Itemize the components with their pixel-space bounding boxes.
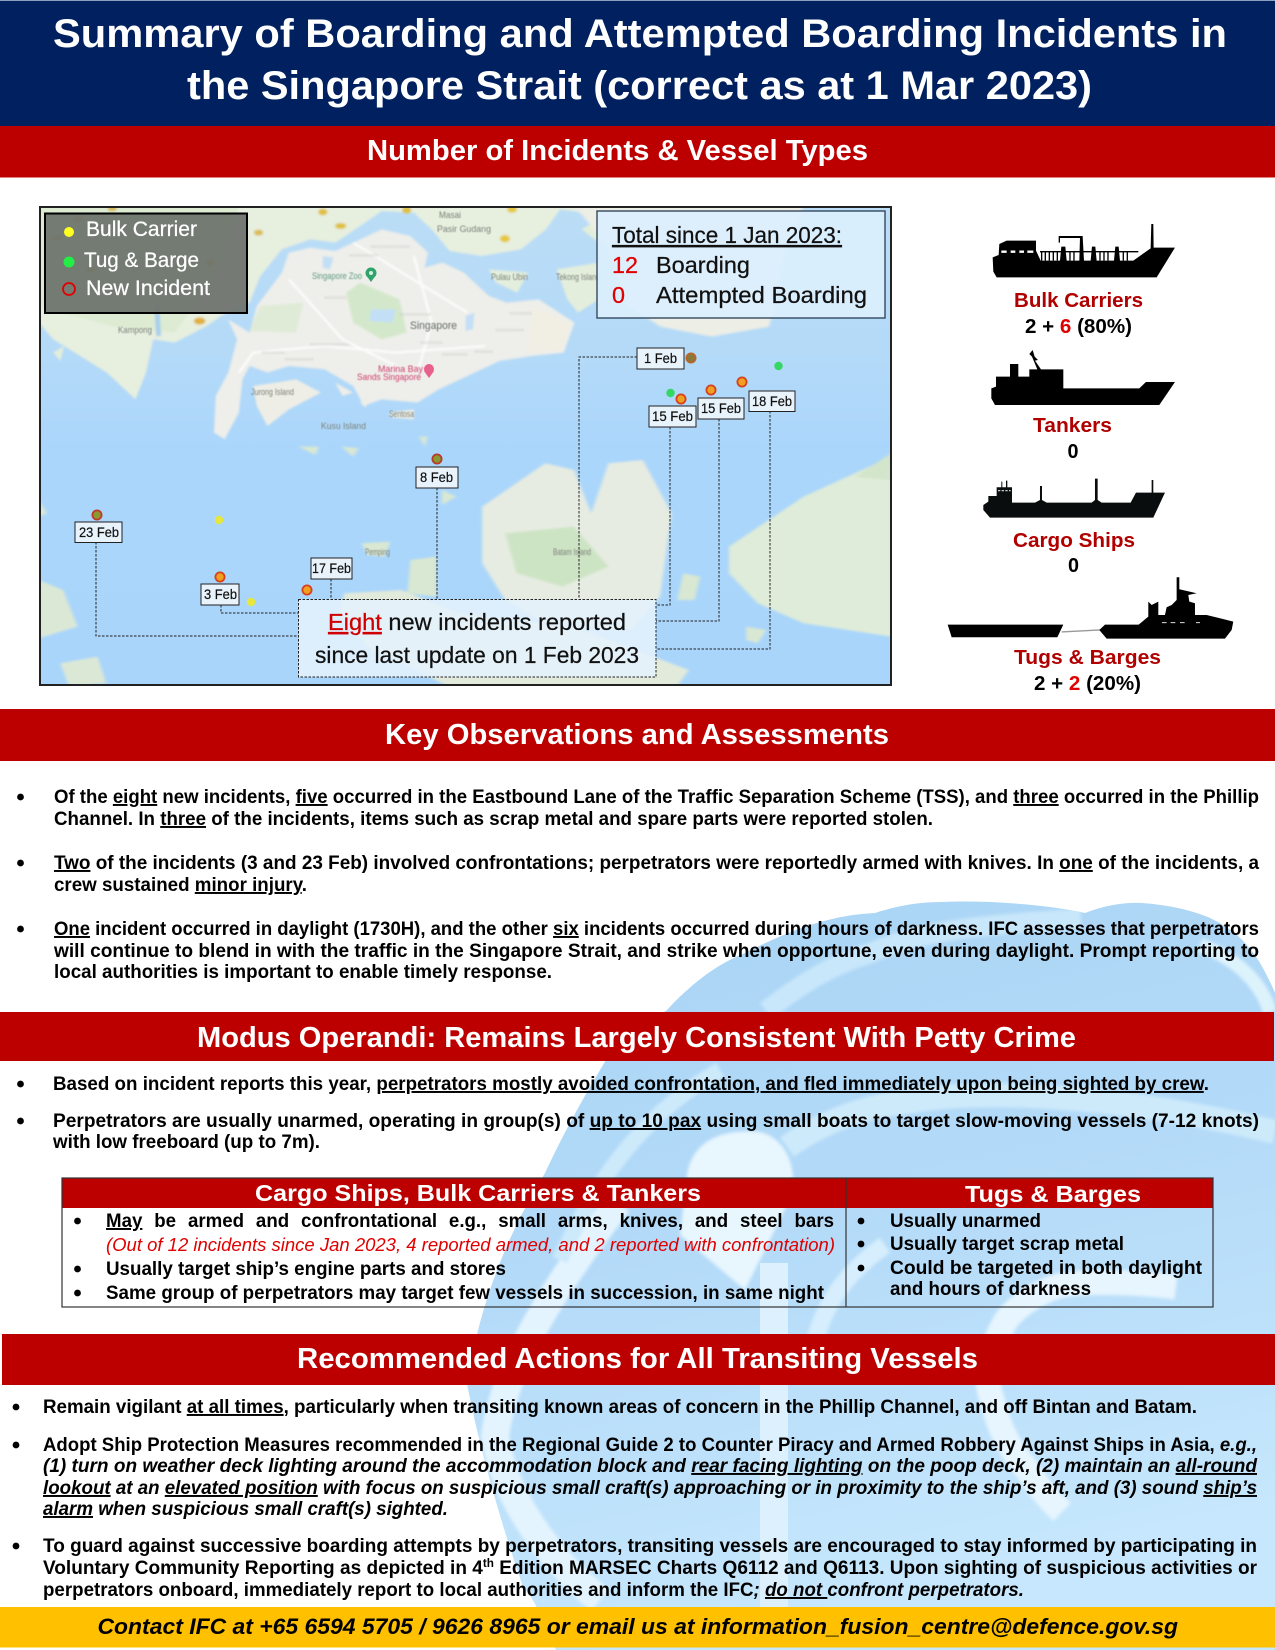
total incidents box: 0 bbox=[612, 282, 625, 308]
text block: recommended actions: th bbox=[483, 1556, 494, 1570]
map place names bbox=[118, 210, 600, 557]
date labels: 15 Feb bbox=[652, 409, 693, 424]
text block: recommended actions: (1) turn on weather deck lighting around the accommodation block and rear facing lighting on the poop deck, (2) maintain an all-round bbox=[43, 1455, 1258, 1477]
date labels: 18 Feb bbox=[752, 394, 792, 409]
table cell: tugs and barges list: Could be targeted in both daylight bbox=[890, 1257, 1202, 1279]
map place names: Kampong bbox=[118, 325, 152, 335]
count: cargo ships: 0 bbox=[1068, 554, 1079, 577]
text block: recommended actions: Adopt Ship Protection Measures recommended in the Regional Guide 2 to Counter Piracy and Armed Robbery Against Ships in Asia, e.g., bbox=[43, 1434, 1257, 1456]
map place names: Sands Singapore bbox=[357, 372, 421, 382]
heading: Modus Operandi: Modus Operandi: Remains Largely Consistent With Petty Crime bbox=[197, 1022, 1076, 1054]
table cell: cargo ships list bbox=[74, 1210, 835, 1304]
map legend: Tug & Barge bbox=[84, 248, 199, 272]
text block: modus operandi: Based on incident reports this year, perpetrators mostly avoided confrontation, and fled immediately upon being sighted by crew. bbox=[53, 1073, 1209, 1095]
label: tugs and barges: Tugs & Barges bbox=[1014, 647, 1161, 669]
icon: tanker silhouette bbox=[991, 350, 1175, 405]
map place names: Marina Bay bbox=[378, 364, 423, 374]
background watermark: IFC logo bbox=[440, 890, 1275, 1650]
heading: Recommended Actions: Recommended Actions for All Transiting Vessels bbox=[297, 1343, 978, 1375]
title bar: Summary of Boarding and Attempted Boarding Incidents in bbox=[53, 12, 1227, 56]
text block: recommended actions: To guard against successive boarding attempts by perpetrators, transiting vessels are encouraged to stay informed by participating in bbox=[43, 1535, 1257, 1557]
text block: key observations: crew sustained minor injury. bbox=[54, 874, 307, 896]
table cell: tugs and barges list bbox=[858, 1210, 1202, 1300]
map place names: Pulau Ubin bbox=[491, 272, 528, 282]
contact footer bbox=[0, 1607, 1275, 1648]
icon: tug and barge silhouette bbox=[948, 577, 1233, 639]
date labels: 15 Feb bbox=[701, 401, 741, 416]
panel: vessel types bbox=[948, 224, 1233, 695]
incident markers bbox=[92, 353, 783, 606]
map place names: Pasir Gudang bbox=[437, 224, 491, 234]
text block: recommended actions: alarm when suspicious small craft(s) sighted. bbox=[43, 1498, 448, 1520]
date labels: 17 Feb bbox=[312, 561, 351, 576]
table cell: cargo ships list: May be armed and confrontational e.g., small arms, knives, and steel bars bbox=[106, 1210, 834, 1232]
text block: modus operandi: Perpetrators are usually unarmed, operating in group(s) of up to 10 pax using small boats to target slow-moving vessels (7-12 knots) bbox=[53, 1110, 1259, 1132]
date labels: 8 Feb bbox=[420, 470, 453, 485]
callout: eight new incidents: since last update on 1 Feb 2023 bbox=[315, 642, 639, 668]
map place names: Tekong Island bbox=[556, 272, 600, 282]
total incidents box: Boarding bbox=[656, 252, 750, 278]
heading: Number of Incidents and Vessel Types: Number of Incidents & Vessel Types bbox=[367, 135, 868, 167]
text block: key observations: Two of the incidents (3 and 23 Feb) involved confrontations; perpetrators were reportedly armed with knives. In one of the incidents, a bbox=[54, 852, 1259, 874]
text block: recommended actions: perpetrators onboard, immediately report to local authorities and inform the IFC; do not confront perpetrators. bbox=[43, 1579, 1024, 1601]
text block: modus operandi: with low freeboard (up to 7m). bbox=[52, 1131, 320, 1153]
map place names: Masai bbox=[439, 210, 461, 220]
map pins bbox=[366, 268, 434, 378]
date labels: 1 Feb bbox=[644, 351, 677, 366]
title bar: the Singapore Strait (correct as at 1 Mar 2023) bbox=[187, 64, 1092, 108]
table: perpetrator profile by vessel type bbox=[62, 1178, 1213, 1307]
text block: key observations: Channel. In three of the incidents, items such as scrap metal and spare parts were reported stolen. bbox=[54, 808, 933, 830]
map place names: Batam Island bbox=[553, 547, 591, 557]
text block: recommended actions bbox=[13, 1396, 1258, 1601]
total incidents box: 12 bbox=[612, 252, 638, 278]
table cell: tugs and barges list: Usually unarmed bbox=[890, 1210, 1041, 1232]
map place names: Singapore bbox=[410, 320, 457, 332]
date labels: 23 Feb bbox=[79, 525, 119, 540]
map legend: Bulk Carrier bbox=[86, 217, 197, 241]
map place names: Singapore Zoo bbox=[312, 271, 362, 281]
heading: Key Observations and Assessments: Key Observations and Assessments bbox=[385, 719, 889, 751]
date labels: 3 Feb bbox=[204, 587, 237, 602]
table header: cargo ships, bulk carriers and tankers: Cargo Ships, Bulk Carriers & Tankers bbox=[255, 1180, 701, 1206]
table cell: cargo ships list: Usually target ship’s engine parts and stores bbox=[106, 1258, 506, 1280]
total incidents box: Attempted Boarding bbox=[656, 282, 867, 308]
map base: Singapore and Johor bbox=[39, 206, 599, 439]
heading: Number of Incidents and Vessel Types bbox=[0, 126, 1275, 178]
text block: recommended actions: Edition MARSEC Charts Q6112 and Q6113. Upon sighting of suspicious activities or bbox=[494, 1557, 1257, 1579]
text block: key observations: local authorities is important to enable timely response. bbox=[54, 961, 552, 983]
table cell: tugs and barges list: and hours of darkness bbox=[890, 1278, 1091, 1300]
text block: recommended actions: Remain vigilant at all times, particularly when transiting known areas of concern in the Phillip Channel, and off Bintan and Batam. bbox=[43, 1396, 1197, 1418]
text block: key observations: will continue to blend in with the traffic in the Singapore Strait, and strike when opportune, even during daylight. Prompt reporting to bbox=[53, 940, 1259, 962]
table cell: cargo ships list: (Out of 12 incidents since Jan 2023, 4 reported armed, and 2 reported with confrontation) bbox=[106, 1234, 835, 1255]
panel: incident map bbox=[38, 205, 892, 686]
count: bulk carriers: 2 + 6 (80%) bbox=[1025, 315, 1132, 338]
icon: cargo ship silhouette bbox=[983, 479, 1165, 518]
table cell: cargo ships list: Same group of perpetrators may target few vessels in succession, in same night bbox=[106, 1282, 824, 1304]
map place names: Kusu Island bbox=[321, 421, 366, 431]
table cell: tugs and barges list: Usually target scrap metal bbox=[890, 1233, 1124, 1255]
contact footer: Contact IFC at +65 6594 5705 / 9626 8965 or email us at information_fusion_centre@defence.gov.sg bbox=[98, 1614, 1179, 1639]
text block: key observations bbox=[17, 786, 1259, 983]
text block: recommended actions: Voluntary Community Reporting as depicted in 4 bbox=[43, 1557, 493, 1579]
text block: modus operandi bbox=[17, 1073, 1259, 1153]
text block: key observations: One incident occurred in daylight (1730H), and the other six incidents occurred during hours of darkness. IFC assesses that perpetrators bbox=[54, 918, 1259, 940]
date labels bbox=[75, 348, 795, 605]
count: tankers: 0 bbox=[1068, 440, 1078, 463]
icon: bulk carrier silhouette bbox=[993, 224, 1175, 277]
map place names: Jurong Island bbox=[251, 387, 294, 397]
callout: eight new incidents: Eight new incidents reported bbox=[328, 609, 626, 635]
label: tankers: Tankers bbox=[1033, 415, 1112, 437]
dashed leader lines bbox=[96, 357, 770, 649]
label: bulk carriers: Bulk Carriers bbox=[1014, 290, 1143, 312]
callout: eight new incidents bbox=[298, 600, 656, 677]
label: cargo ships: Cargo Ships bbox=[1013, 530, 1135, 552]
map place names: Sentosa bbox=[389, 409, 414, 419]
map legend bbox=[45, 214, 247, 313]
heading: Key Observations and Assessments bbox=[0, 709, 1275, 761]
text block: recommended actions: lookout at an elevated position with focus on suspicious small craft(s) approaching or in proximity to the ship’s aft, and (3) sound ship’s bbox=[43, 1477, 1257, 1499]
total incidents box: Total since 1 Jan 2023: bbox=[612, 222, 842, 248]
heading: Modus Operandi bbox=[0, 1012, 1274, 1061]
table header: tugs and barges: Tugs & Barges bbox=[965, 1181, 1141, 1207]
heading: Recommended Actions bbox=[2, 1334, 1275, 1385]
map legend: New Incident bbox=[86, 276, 210, 300]
count: tugs and barges: 2 + 2 (20%) bbox=[1034, 672, 1141, 695]
total incidents box bbox=[597, 211, 885, 318]
map place names: Pemping bbox=[365, 547, 390, 557]
map base: southern islands bbox=[38, 205, 891, 686]
text block: key observations: Of the eight new incidents, five occurred in the Eastbound Lane of the Traffic Separation Scheme (TSS), and three occurred in the Phillip bbox=[54, 786, 1259, 808]
title bar bbox=[0, 0, 1275, 126]
